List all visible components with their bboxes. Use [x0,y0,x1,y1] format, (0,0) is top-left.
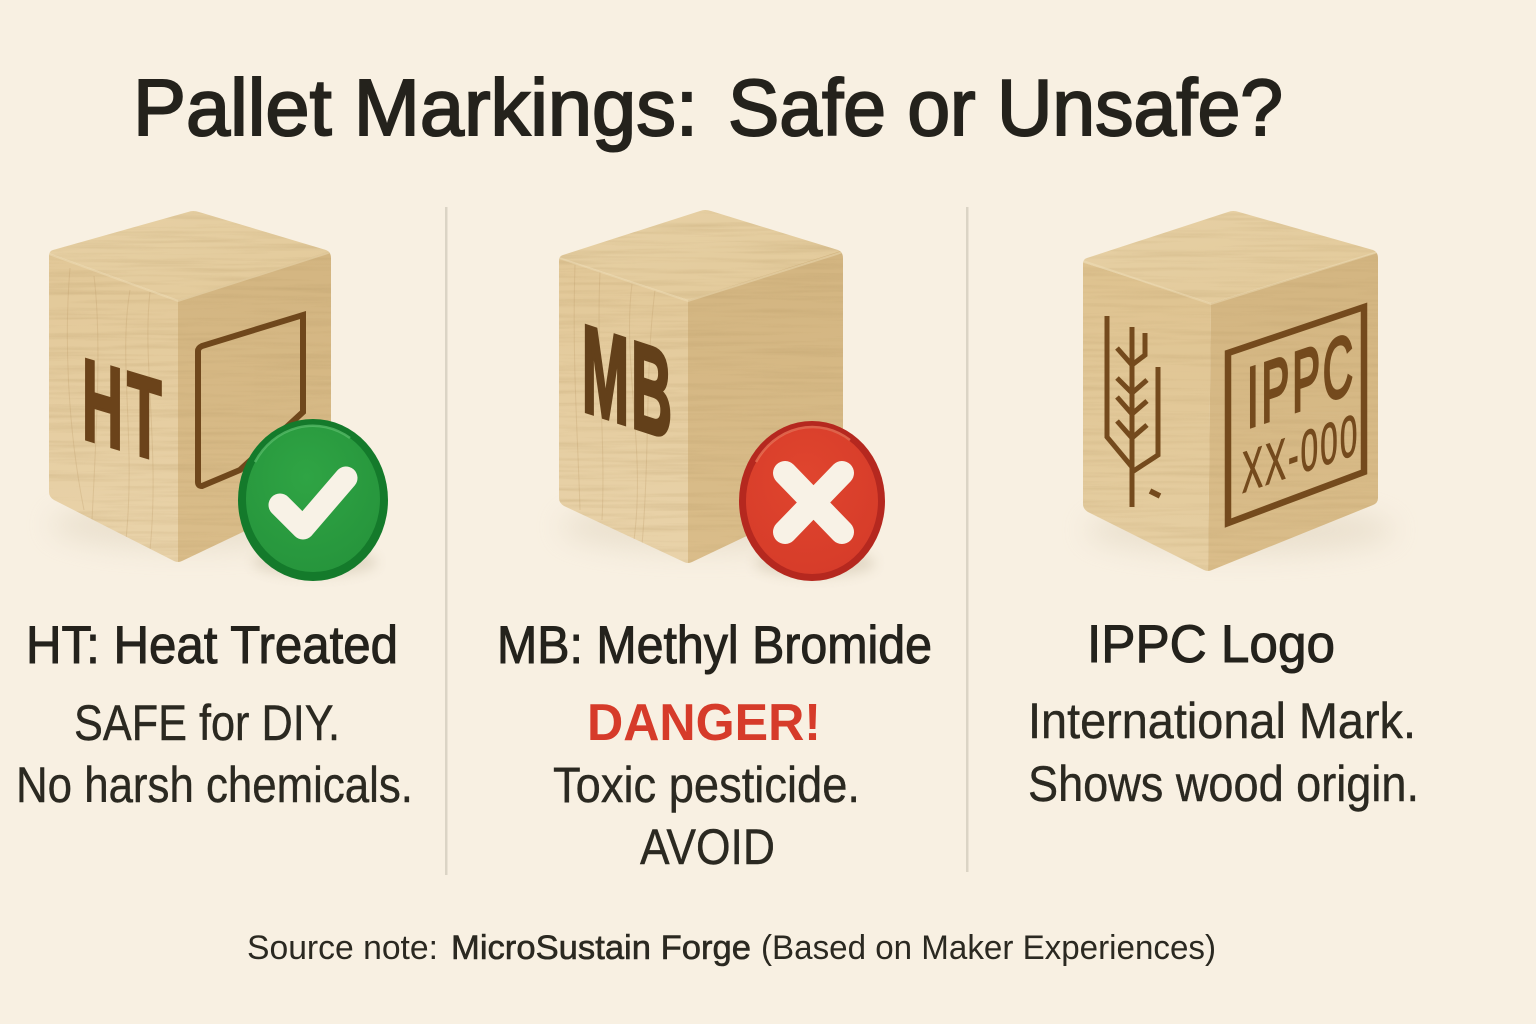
text: MB description: Toxic pesticide. [553,757,860,813]
block mark: MB: MB [582,298,674,467]
block mark: HT: HT [82,334,166,488]
heading: IPPC: IPPC Logo [1087,615,1335,674]
icon: green check badge [238,419,388,581]
icon: HT wooden block [40,205,340,570]
source note: (Based on Maker Experiences) [761,929,1216,967]
callout: danger: DANGER! [587,694,821,752]
divider: right [966,207,968,872]
text: MB description: AVOID [640,819,775,875]
title [133,63,1283,152]
block mark: IPPC stamp: XX-000 [1242,401,1359,507]
block mark: wheat symbol [1107,316,1160,507]
icon: red cross badge [739,421,885,581]
text: HT description [16,695,413,813]
title: Safe or Unsafe? [728,63,1283,152]
source note: MicroSustain Forge [451,929,751,967]
title: Pallet Markings: [133,63,698,152]
text: IPPC description [1028,693,1419,812]
text: IPPC description: Shows wood origin. [1028,756,1419,812]
icon: IPPC wooden block [1075,205,1395,577]
panel: HT heat treated [16,205,413,813]
text: IPPC description: International Mark. [1028,693,1416,749]
heading: HT: HT: Heat Treated [26,616,398,675]
divider: left [445,207,448,875]
icon: MB wooden block [550,205,850,570]
heading: MB: MB: Methyl Bromide [497,616,932,675]
block mark: IPPC stamp: IPPC [1247,316,1356,447]
text: MB description [553,757,860,875]
panel: IPPC logo [1028,205,1419,812]
block mark: IPPC stamp [1228,307,1364,523]
source note: Source note: [247,929,438,967]
text: HT description: No harsh chemicals. [16,757,413,813]
panel: MB methyl bromide [497,205,932,875]
source note [247,929,1216,967]
block mark: square outline [198,315,303,486]
text: HT description: SAFE for DIY. [74,695,340,751]
